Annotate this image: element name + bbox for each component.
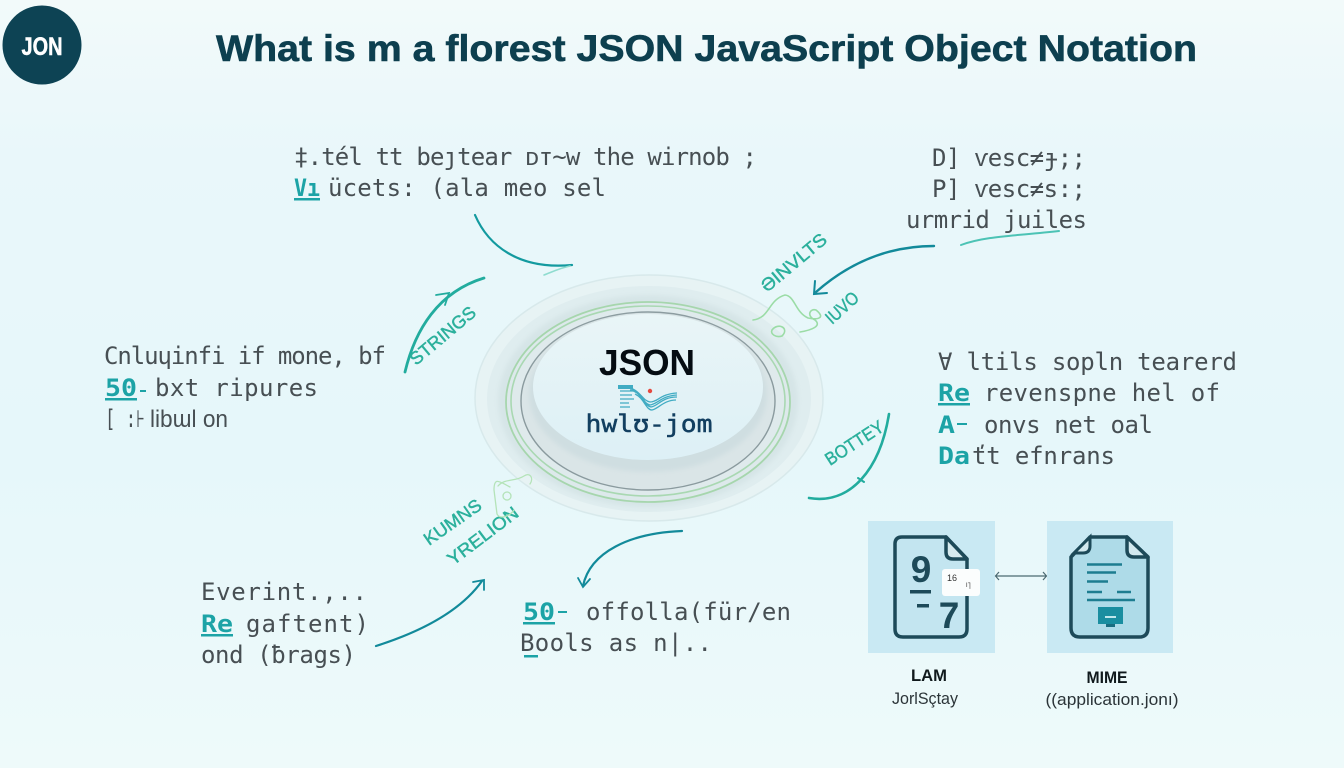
text block: bottom left: Re — [201, 610, 233, 638]
label: top right tags — [757, 229, 863, 328]
label: top right tags: IUVO — [821, 288, 863, 328]
label: bottles: BOTTEY — [821, 417, 888, 469]
text block: right: revenspne hel of — [984, 379, 1220, 407]
text block: top right: P] ⱱesc≠s:; — [932, 175, 1086, 203]
text block: bottom left: gaftent) — [246, 610, 369, 638]
text block: right: ťt efnrans — [972, 442, 1115, 470]
panel: MIME — [1047, 521, 1173, 653]
text block: top right: urmrid juiles — [906, 206, 1087, 234]
text block: top right — [906, 144, 1087, 234]
text block: bottom middle: offolla(für/en — [586, 598, 791, 626]
text block: right: Da — [938, 442, 970, 470]
caption: LAM: LAM — [911, 666, 947, 685]
badge: JON logo: JON — [22, 33, 62, 61]
text block: bottom left: Everint.,.. — [201, 578, 367, 606]
disc layers — [475, 275, 823, 521]
central JSON disc — [475, 275, 823, 521]
text block: top left — [294, 143, 757, 202]
title: What is m a florest JSON JavaScript Object Notation — [216, 28, 1197, 69]
text block: bottom left: ond (ƀrags) — [201, 641, 356, 669]
caption: LAM: JorlSçtay — [892, 689, 958, 708]
text block: top left: ‡.tél tt beȷtear ᴅт~w the wirnob ; — [294, 143, 757, 171]
tooltip card: ᴵ˥ — [966, 581, 971, 591]
panel: LAM — [868, 521, 995, 653]
caption: MIME: MIME — [1086, 668, 1128, 687]
icon: data wave — [618, 385, 677, 410]
text block: bottom middle: Bools as n|.. — [520, 629, 712, 657]
icon: text document — [1071, 537, 1148, 637]
text block: left — [104, 342, 386, 433]
arrow: bottom middle — [578, 531, 682, 587]
caption: LAM — [892, 666, 958, 708]
tooltip card — [942, 569, 980, 596]
text block: left: [ :⊦ — [105, 405, 145, 433]
text block: bottom middle — [520, 598, 791, 658]
disc subtitle: hwlʊ-jom — [586, 410, 712, 438]
text block: left: bxt ripures — [155, 374, 318, 402]
icon: numbers document: 9 — [911, 549, 931, 590]
text block: bottom middle: 50 — [523, 598, 555, 626]
arrow: bottles — [809, 414, 889, 499]
label: strings: STRINGS — [406, 302, 480, 369]
tooltip card: 16 — [947, 573, 957, 583]
text block: right: A — [938, 411, 956, 439]
text block: top left: Vı — [294, 174, 320, 202]
caption: MIME — [1046, 668, 1178, 709]
badge: JON logo — [2, 6, 82, 84]
arrow: strings — [405, 278, 484, 372]
icon: numbers document — [895, 537, 967, 637]
icon: green squiggle top right — [753, 295, 821, 337]
icon: green squiggle bottom left — [494, 475, 532, 517]
arrow: top right to disc — [814, 231, 1059, 294]
text block: bottom left — [201, 578, 369, 669]
text block: right: Re — [938, 379, 970, 407]
text block: right: onvs net oal — [984, 411, 1153, 439]
caption: MIME: ((application.jonı) — [1046, 690, 1178, 709]
arrow: top left to disc — [475, 215, 572, 275]
text block: right — [938, 348, 1237, 470]
text block: top left: ücets: (ala meo sel — [328, 174, 606, 202]
text block: top right: D] ⱱesc≠ɟ;; — [932, 144, 1086, 172]
text block: left: libɯl on — [150, 406, 228, 433]
label: bottom left tags: KUMNS — [420, 495, 485, 549]
text block: left: Cnluɥinfi if mone, bf — [104, 342, 386, 370]
label: bottom left tags — [420, 495, 522, 569]
text block: right: ∀ ltils sopln tearerd — [938, 348, 1237, 376]
arrow: bottom left — [376, 580, 484, 646]
label: top right tags: ƏINVLTS — [757, 229, 831, 296]
text block: left: 50 — [105, 374, 137, 402]
disc heading: JSON — [599, 342, 695, 383]
double arrow — [996, 572, 1046, 580]
label: bottom left tags: YRELION — [443, 503, 522, 569]
icon: numbers document: 7 — [939, 595, 959, 636]
